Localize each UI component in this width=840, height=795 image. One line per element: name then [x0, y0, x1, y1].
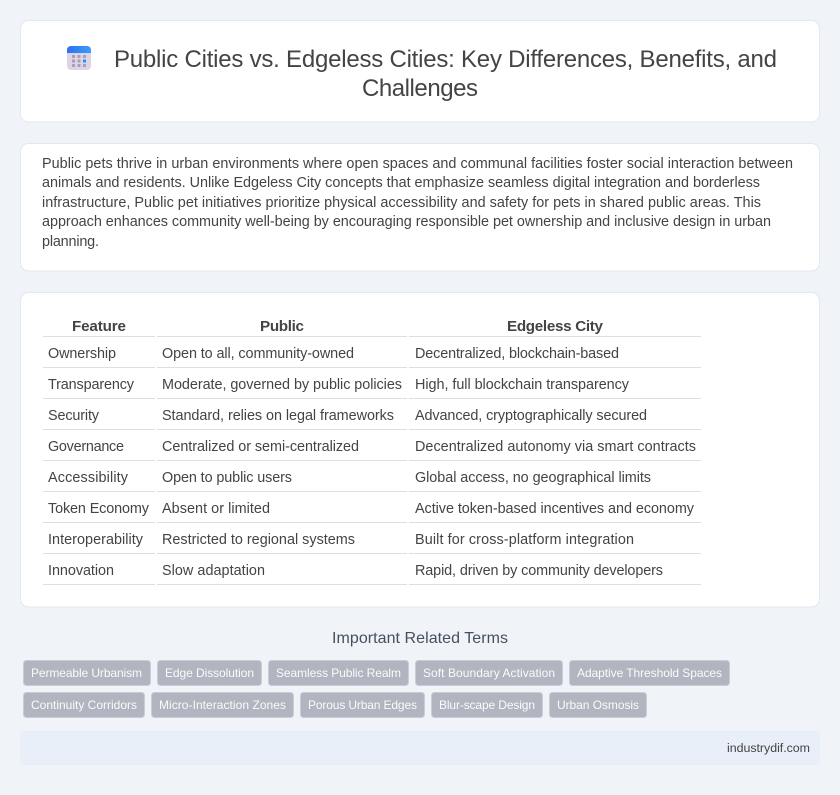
row: Interoperability: Built for cross-platform integration [415, 532, 634, 548]
row: Interoperability: Restricted to regional systems [162, 532, 355, 548]
row: Security: Advanced, cryptographically secured [415, 408, 647, 424]
row: Governance: Decentralized autonomy via smart contracts [415, 439, 696, 455]
row: Accessibility: Open to public users [162, 470, 292, 486]
row: Security: Security [48, 408, 100, 424]
tag: Permeable Urbanism [24, 660, 150, 686]
tag: Soft Boundary Activation [416, 660, 562, 686]
row: Token Economy: Absent or limited [162, 501, 270, 517]
row: Accessibility: Global access, no geographical limits [415, 470, 651, 486]
tag: Blur-scape Design: Blur-scape Design [439, 698, 535, 712]
tag: Micro-Interaction Zones [152, 692, 294, 718]
row: Transparency: Moderate, governed by public policies [162, 377, 402, 393]
tag: Edge Dissolution: Edge Dissolution [165, 666, 254, 680]
row: Governance: Governance [48, 439, 124, 455]
tag: Blur-scape Design [432, 692, 542, 718]
title: Public Cities vs. Edgeless Cities: Key Differences, Benefits, and [114, 46, 777, 73]
tag: Seamless Public Realm [268, 660, 408, 686]
text block: introduction paragraph: infrastructure, Public pet initiatives prioritize physical accessibility and safety for pets in shared public areas. This [42, 195, 761, 211]
tag: Adaptive Threshold Spaces [570, 660, 730, 686]
table header: Public [260, 318, 304, 335]
tag: Porous Urban Edges: Porous Urban Edges [308, 698, 417, 712]
tag: Seamless Public Realm: Seamless Public Realm [276, 666, 401, 680]
table header [43, 318, 701, 337]
row: Token Economy [43, 501, 701, 523]
title [114, 46, 777, 102]
row: Ownership: Decentralized, blockchain-based [415, 346, 619, 362]
tag list: related terms [24, 660, 730, 718]
row: Innovation: Slow adaptation [162, 563, 265, 579]
text block: introduction paragraph: planning. [42, 234, 99, 250]
icon: calendar [67, 46, 91, 70]
row: Innovation [43, 563, 701, 585]
table header: Edgeless City [507, 318, 604, 335]
row: Ownership: Open to all, community-owned [162, 346, 354, 362]
row: Ownership [43, 346, 701, 368]
row: Innovation: Rapid, driven by community developers [415, 563, 663, 579]
text block: introduction paragraph: animals and residents. Unlike Edgeless City concepts that emphasize seamless digital integration and borderless [42, 175, 760, 191]
tag: Continuity Corridors [24, 692, 144, 718]
tag: Soft Boundary Activation: Soft Boundary Activation [423, 666, 555, 680]
row: Accessibility [43, 470, 701, 492]
row: Security: Standard, relies on legal frameworks [162, 408, 394, 424]
row: Innovation: Innovation [48, 563, 114, 579]
row: Token Economy: Token Economy [48, 501, 150, 517]
row: Security [43, 408, 701, 430]
footer source text: industrydif.com [727, 741, 810, 755]
tag: Permeable Urbanism: Permeable Urbanism [31, 666, 142, 680]
text block: introduction paragraph [42, 156, 793, 250]
panel: header [20, 20, 820, 122]
tag: Edge Dissolution [158, 660, 262, 686]
row: Interoperability [43, 532, 701, 554]
tag: Micro-Interaction Zones: Micro-Interaction Zones [159, 698, 286, 712]
heading: related terms: Important Related Terms [332, 630, 508, 647]
row: Interoperability: Interoperability [48, 532, 144, 548]
panel: comparison table [20, 292, 820, 607]
row: Token Economy: Active token-based incentives and economy [415, 501, 695, 517]
row: Transparency [43, 377, 701, 399]
tag: Urban Osmosis [550, 692, 646, 718]
text block: introduction paragraph: approach enhances community well-being by encouraging responsible pet ownership and inclusive design in urban [42, 214, 771, 230]
row: Ownership: Ownership [48, 346, 116, 362]
row: Accessibility: Accessibility [48, 470, 129, 486]
tag: Adaptive Threshold Spaces: Adaptive Threshold Spaces [577, 666, 722, 680]
tag: Continuity Corridors: Continuity Corridors [31, 698, 137, 712]
row: Governance [43, 439, 701, 461]
tag: Porous Urban Edges [300, 692, 424, 718]
table header: Feature [72, 318, 126, 335]
row: Transparency: High, full blockchain transparency [415, 377, 630, 393]
panel: introduction [20, 144, 820, 271]
text block: introduction paragraph: Public pets thrive in urban environments where open spaces and communal facilities foster social interaction between [42, 156, 793, 172]
row: Governance: Centralized or semi-centralized [162, 439, 359, 455]
tag: Urban Osmosis: Urban Osmosis [557, 698, 639, 712]
footer [20, 731, 820, 765]
row: Transparency: Transparency [48, 377, 135, 393]
title: Challenges [362, 75, 478, 102]
